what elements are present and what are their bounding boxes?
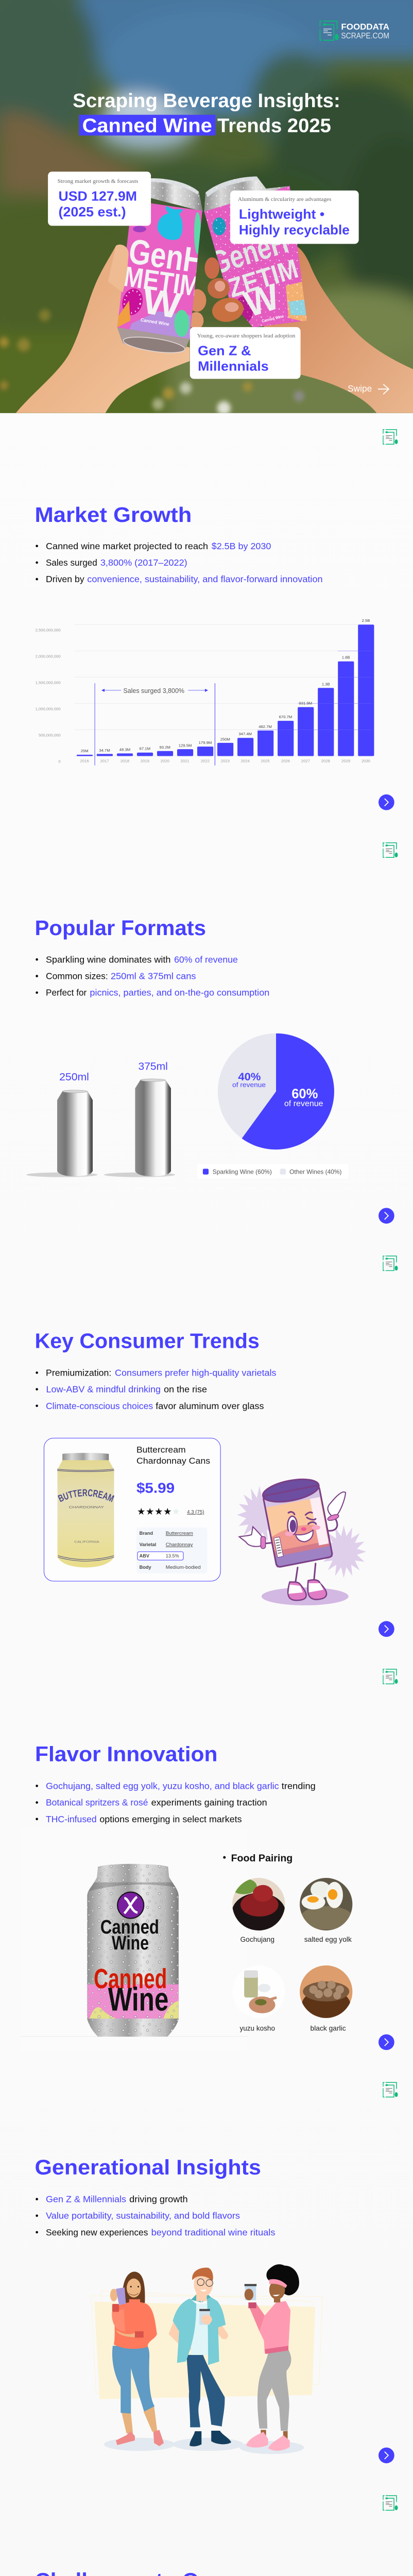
spec table: Body	[140, 1565, 151, 1570]
pie chart: 60%	[291, 1087, 318, 1101]
bar chart: 500,000,000	[39, 733, 61, 738]
bullet list: favor aluminum over glass	[156, 1401, 264, 1411]
bar chart: 2030	[362, 759, 370, 764]
swipe prompt	[348, 383, 389, 394]
next arrow	[378, 1208, 394, 1224]
spec table	[136, 1528, 208, 1573]
heading: Popular Formats	[35, 916, 206, 940]
bar chart: 2028	[321, 759, 330, 764]
callout: audience: Gen Z &	[198, 344, 251, 358]
title	[73, 90, 340, 136]
bar chart: 670.7M	[279, 715, 292, 719]
product details: Buttercream	[136, 1445, 186, 1454]
product can	[57, 1453, 114, 1567]
bullet list: Perfect for	[46, 988, 87, 998]
bar chart: 2020	[161, 759, 169, 764]
bar chart: 2.5B	[362, 618, 370, 623]
title: Trends 2025	[217, 114, 331, 136]
next arrow	[378, 794, 394, 810]
right can: GeneH	[206, 224, 292, 282]
panel: flavor innovation	[21, 1669, 398, 2050]
bar chart	[36, 618, 374, 764]
bar chart: 2,500,000,000	[36, 628, 61, 633]
title: Scraping Beverage Insights:	[73, 90, 340, 111]
spec table: ABV	[140, 1553, 150, 1558]
callout: packaging: Highly recyclable	[239, 223, 350, 238]
bar chart: 2,000,000,000	[36, 654, 61, 659]
spec table: Brand	[140, 1531, 153, 1536]
callout: market size: USD 127.9M	[59, 189, 137, 204]
photo panel: canned wine can: Canned	[100, 1916, 159, 1938]
spec table: 13.5%	[166, 1553, 179, 1558]
bullet list: trending	[282, 1782, 316, 1791]
bullet list: Driven by	[46, 574, 84, 584]
bullet list	[36, 541, 323, 584]
chart annotation: sales surge	[95, 683, 215, 766]
chart legend: Sparkling Wine (60%)	[213, 1168, 272, 1176]
brand logo: FOODDATA	[341, 22, 389, 32]
right can	[203, 177, 311, 329]
food: salted egg yolk: salted egg yolk	[304, 1936, 352, 1943]
bar chart: 2019	[141, 759, 149, 764]
right can: Canned Wine	[261, 314, 284, 324]
panel: generational insights	[35, 2082, 398, 2463]
spec table: Buttercream	[166, 1531, 193, 1536]
logo icon	[383, 1669, 398, 1684]
heading: Key Consumer Trends	[35, 1329, 260, 1352]
left can: Canned Wine	[140, 317, 170, 327]
bullet list: Gochujang, salted egg yolk, yuzu kosho, and black garlic	[46, 1782, 279, 1791]
food: black garlic	[299, 1965, 353, 2032]
callout: packaging: Aluminum & circularity are advantages	[238, 197, 331, 202]
chart legend	[197, 1164, 348, 1178]
bar chart: 2026	[281, 759, 290, 764]
icon: 375ml can	[104, 1061, 175, 1177]
brand logo	[320, 21, 389, 40]
pie chart: of revenue	[232, 1081, 266, 1089]
brand logo: SCRAPE.COM	[341, 31, 389, 40]
bullet list: options emerging in select markets	[99, 1815, 242, 1824]
bar chart: 2017	[100, 759, 109, 764]
rating: 4.3 (75)	[187, 1510, 204, 1515]
next arrow	[378, 2035, 394, 2050]
bullet list	[36, 1368, 277, 1411]
bar chart: 2016	[80, 759, 89, 764]
product can: CHARDONNAY	[69, 1506, 104, 1510]
rating: ★	[171, 1506, 180, 1517]
callout: market size: Strong market growth & forecasts	[58, 179, 139, 184]
callout: audience: Millennials	[198, 359, 269, 374]
bar chart: 25M	[81, 749, 89, 753]
illustration: winking can mascot	[237, 1476, 366, 1605]
heading: Market Growth	[35, 503, 192, 527]
bullet list: $2.5B by 2030	[212, 541, 271, 551]
food: salted egg yolk	[299, 1877, 353, 1943]
food: gochujang	[231, 1877, 286, 1943]
bullet list: on the rise	[164, 1385, 207, 1395]
bullet list: 3,800% (2017–2022)	[100, 558, 187, 568]
next arrow	[378, 1621, 394, 1637]
callout: packaging: Lightweight •	[239, 207, 324, 222]
chart legend: Other Wines (40%)	[289, 1168, 341, 1176]
bullet list	[36, 1782, 316, 1824]
logo icon	[383, 1256, 398, 1270]
hero blurred photo background	[0, 0, 413, 431]
food pairing heading: Food Pairing	[231, 1853, 292, 1864]
bullet list: Sales surged	[46, 558, 97, 568]
pie chart	[218, 1033, 334, 1149]
logo icon	[383, 843, 398, 857]
callout: market size: (2025 est.)	[59, 205, 126, 219]
photo panel: canned wine can: Canned	[94, 1963, 167, 1994]
bullet list: experiments gaining traction	[151, 1798, 267, 1808]
bullet list	[36, 2195, 276, 2238]
photo panel: canned wine can: Wine	[108, 1981, 168, 2018]
bar chart: 2021	[181, 759, 190, 764]
bar chart: 482.7M	[259, 724, 272, 729]
chart annotation: sales surge: Sales surged 3,800%	[123, 687, 184, 694]
right can: W	[239, 276, 284, 325]
panel: key consumer trends	[35, 1256, 398, 1637]
bar chart: 931.9M	[299, 701, 312, 705]
logo icon	[383, 2082, 398, 2097]
bar chart: 93.2M	[160, 745, 170, 750]
product card: Chardonnay Cans	[136, 1456, 210, 1466]
logo icon	[383, 430, 398, 444]
heading: Flavor Innovation	[35, 1742, 217, 1766]
price: $5.99	[136, 1480, 175, 1496]
bullet list: Sparkling wine dominates with	[46, 955, 170, 964]
next arrow	[378, 2448, 394, 2463]
bar chart: 2018	[121, 759, 129, 764]
swipe prompt: Swipe	[348, 383, 372, 394]
callout: audience: Young, eco-aware shoppers lead adoption	[197, 333, 295, 339]
bullet list	[36, 955, 269, 998]
photo panel: canned wine can: Wine	[112, 1932, 149, 1954]
bar chart: 67.1M	[140, 747, 150, 751]
bullet list: Low-ABV & mindful drinking	[46, 1385, 161, 1395]
hand fingers in front of cans	[108, 245, 246, 325]
spec table: Varietal	[140, 1542, 156, 1547]
bullet list: Premiumization:	[46, 1368, 111, 1378]
bullet list: 250ml & 375ml cans	[111, 972, 196, 981]
bullet list: Common sizes:	[46, 972, 108, 981]
left can: W	[140, 280, 184, 327]
panel: market growth	[35, 430, 398, 810]
bar chart: 1.8B	[342, 655, 350, 660]
bullet list: 60% of revenue	[174, 955, 238, 964]
icon: 375ml can: 375ml	[139, 1061, 168, 1073]
bar chart: 179.9M	[199, 740, 212, 745]
rating	[137, 1506, 204, 1517]
food: yuzu kosho	[240, 1970, 277, 2032]
product can: CALIFORNIA	[74, 1540, 100, 1544]
logo icon	[383, 2496, 398, 2510]
product can: BUTTERCREAM	[58, 1489, 114, 1502]
left can	[117, 178, 206, 355]
bullet list: Gen Z & Millennials	[46, 2195, 126, 2205]
illustration: woman with afro	[245, 2264, 299, 2451]
left can: GenH	[127, 232, 206, 281]
panel: popular formats	[26, 843, 398, 1224]
bar chart: 1,500,000,000	[36, 681, 61, 685]
bullet list: Seeking new experiences	[46, 2228, 148, 2238]
product card	[43, 1437, 221, 1582]
bullet list: driving growth	[129, 2195, 188, 2205]
right can: ZETIM	[225, 253, 301, 303]
panel: challenges to overcome	[35, 2496, 398, 2576]
spec table: Medium-bodied	[166, 1565, 201, 1570]
heading: Generational Insights	[35, 2156, 261, 2179]
right hand and arm	[204, 244, 413, 413]
callout: packaging	[230, 191, 359, 244]
bar chart: 0	[58, 759, 61, 764]
illustration: man with glasses	[168, 2267, 231, 2446]
bar chart: 2027	[301, 759, 310, 764]
bullet list: Consumers prefer high-quality varietals	[115, 1368, 277, 1378]
bar chart: 1.3B	[322, 682, 330, 687]
bar chart: 48.3M	[119, 748, 130, 752]
bar chart: 1,000,000,000	[36, 707, 61, 711]
photo panel: canned wine can	[21, 1864, 248, 2037]
callout: audience	[190, 327, 301, 379]
left hand and arm	[16, 245, 206, 413]
icon: 250ml can: 250ml	[59, 1072, 89, 1083]
bullet list: picnics, parties, and on-the-go consumption	[90, 988, 269, 998]
food: black garlic: black garlic	[311, 2024, 346, 2032]
bar chart: 2024	[241, 759, 250, 764]
illustration backdrop	[91, 2291, 322, 2454]
pie chart: 40%	[238, 1071, 261, 1083]
food: gochujang: Gochujang	[240, 1936, 274, 1943]
bar chart: 2029	[341, 759, 350, 764]
bullet list: Botanical spritzers & rosé	[46, 1798, 148, 1808]
bar chart: 2025	[261, 759, 270, 764]
bar chart: 34.7M	[99, 748, 110, 753]
panel: hero	[0, 0, 413, 431]
spec table: Chardonnay	[166, 1542, 193, 1547]
food: yuzu kosho: yuzu kosho	[239, 2024, 275, 2032]
bullet list: Climate-conscious choices	[46, 1401, 153, 1411]
bullet list: Canned wine market projected to reach	[46, 541, 208, 551]
bar chart: 347.4M	[238, 732, 252, 736]
icon: 250ml can	[26, 1072, 97, 1177]
bar chart: 2023	[221, 759, 230, 764]
bar chart: 129.5M	[179, 743, 192, 748]
left can: METIM	[122, 260, 201, 303]
bar chart: 250M	[220, 737, 230, 741]
bullet list: convenience, sustainability, and flavor-forward innovation	[87, 574, 323, 584]
callout: market size	[48, 172, 151, 226]
bullet list: THC-infused	[46, 1815, 97, 1824]
rating: ★★★★	[137, 1506, 171, 1517]
title: Canned Wine	[82, 114, 212, 136]
illustration: woman with purple cup	[110, 2272, 164, 2446]
bullet list: beyond traditional wine rituals	[151, 2228, 276, 2238]
bullet list: Value portability, sustainability, and bold flavors	[46, 2211, 240, 2221]
pie chart: of revenue	[284, 1099, 323, 1108]
bar chart: 2022	[201, 759, 210, 764]
